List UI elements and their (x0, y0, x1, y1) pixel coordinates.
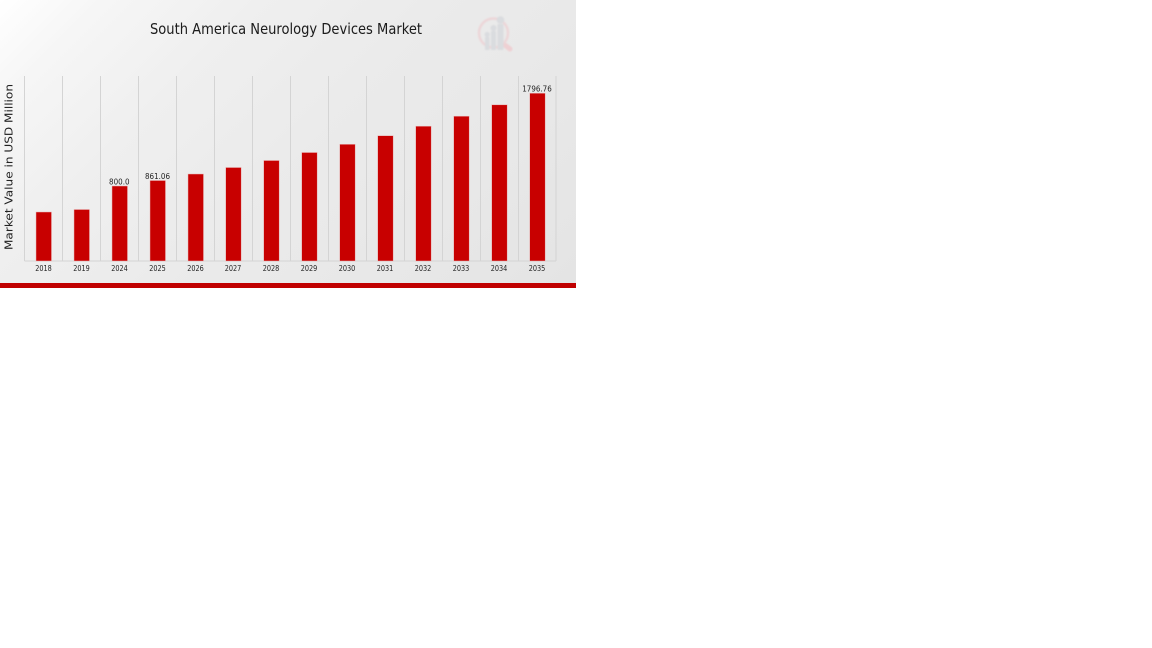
bottom red band (0, 283, 576, 288)
x-axis year labels: 2019 (73, 264, 90, 273)
x-axis year labels: 2033 (453, 264, 469, 273)
x-axis year labels: 2028 (263, 264, 279, 273)
y-axis label: Market Value in USD Million (2, 84, 16, 250)
x-axis year labels: 2029 (301, 264, 317, 273)
x-axis year labels (35, 264, 545, 273)
x-axis year labels: 2027 (225, 264, 241, 273)
icon: watermark logo (479, 16, 510, 50)
bar chart (35, 84, 552, 273)
x-axis year labels: 2024 (111, 264, 128, 273)
data value labels: 1796.76 (522, 84, 552, 94)
bars (36, 93, 545, 261)
x-axis year labels: 2034 (491, 264, 507, 273)
x-axis year labels: 2031 (377, 264, 393, 273)
x-axis year labels: 2025 (149, 264, 166, 273)
data value labels (109, 84, 552, 186)
x-axis year labels: 2018 (35, 264, 52, 273)
data value labels: 800.0 (109, 178, 130, 186)
title: South America Neurology Devices Market (150, 20, 422, 38)
x-axis year labels: 2032 (415, 264, 431, 273)
x-axis year labels: 2030 (339, 264, 355, 273)
x-axis year labels: 2026 (187, 264, 204, 273)
data value labels: 861.06 (145, 172, 170, 181)
x-axis year labels: 2035 (529, 264, 545, 273)
